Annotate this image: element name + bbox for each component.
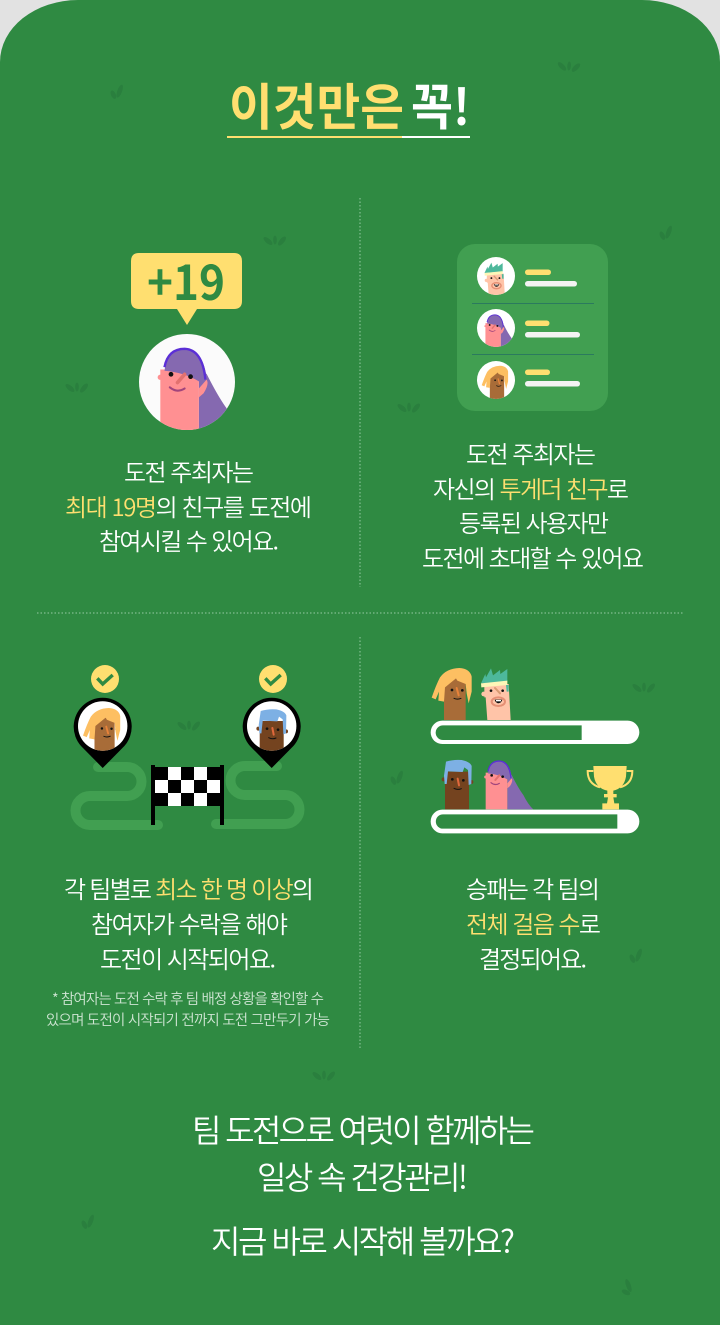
panel: friend limit xyxy=(65,244,312,557)
character: blue hair xyxy=(442,760,473,809)
text: friend list: 도전 주최자는 xyxy=(466,435,596,470)
progress bar: top team xyxy=(431,721,639,744)
closing message: 팀 도전으로 여럿이 함께하는 xyxy=(192,1106,535,1152)
friend row 3 xyxy=(477,361,580,400)
closing message xyxy=(192,1106,535,1263)
closing message: 일상 속 건강관리! xyxy=(257,1153,468,1199)
text: friend limit: 참여시킬 수 있어요. xyxy=(99,522,279,557)
icon: woman avatar xyxy=(139,334,235,430)
race illustration xyxy=(431,668,639,833)
icon: trophy xyxy=(588,766,632,809)
panel: team acceptance xyxy=(46,665,330,1030)
decorative leaves xyxy=(64,60,673,1299)
panel: team steps race xyxy=(431,668,639,975)
text: team acceptance xyxy=(64,870,314,975)
friend list card xyxy=(457,244,608,411)
title: 꼭! xyxy=(411,68,470,140)
icon: check right xyxy=(259,665,287,693)
footnote: 있으며 도전이 시작되기 전까지 도전 그만두기 가능 xyxy=(46,1009,330,1030)
closing message: 지금 바로 시작해 볼까요? xyxy=(211,1217,515,1263)
icon: +19 speech bubble xyxy=(131,244,242,325)
footnote: * 참여자는 도전 수락 후 팀 배정 상황을 확인할 수 xyxy=(52,988,324,1009)
text: team steps: 결정되어요. xyxy=(479,940,587,975)
text: team steps: 승패는 각 팀의 xyxy=(466,870,600,905)
dotted dividers xyxy=(37,198,684,1050)
text: team steps xyxy=(466,870,601,975)
icon: +19 speech bubble: +19 xyxy=(147,244,225,314)
title: 이것만은 xyxy=(229,68,404,140)
icon: left map pin xyxy=(74,698,132,768)
road illustration xyxy=(76,766,300,825)
character: purple hair xyxy=(484,761,533,809)
text: team steps: 전체 걸음 수로 xyxy=(466,905,601,940)
footnote xyxy=(46,988,330,1030)
icon: check left xyxy=(91,665,119,693)
friend row 2 xyxy=(477,309,580,349)
character: blonde xyxy=(432,668,472,720)
text: friend list: 등록된 사용자만 xyxy=(459,504,609,539)
text: friend list xyxy=(422,435,644,574)
text: friend limit xyxy=(65,453,312,557)
icon: checkered flag xyxy=(151,765,224,825)
text: friend list: 자신의 투게더 친구로 xyxy=(433,470,629,505)
text: team acceptance: 각 팀별로 최소 한 명 이상의 xyxy=(64,870,314,905)
icon: right map pin xyxy=(243,698,301,768)
friend row 1 xyxy=(477,257,577,298)
text: friend limit: 최대 19명의 친구를 도전에 xyxy=(65,488,312,523)
panel: friend list xyxy=(422,244,644,574)
character: green hair xyxy=(481,668,511,720)
text: team acceptance: 참여자가 수락을 해야 xyxy=(91,905,288,940)
text: friend limit: 도전 주최자는 xyxy=(124,453,254,488)
text: team acceptance: 도전이 시작되어요. xyxy=(100,940,276,975)
text: friend list: 도전에 초대할 수 있어요 xyxy=(422,539,644,574)
progress bar: bottom team xyxy=(431,810,639,833)
